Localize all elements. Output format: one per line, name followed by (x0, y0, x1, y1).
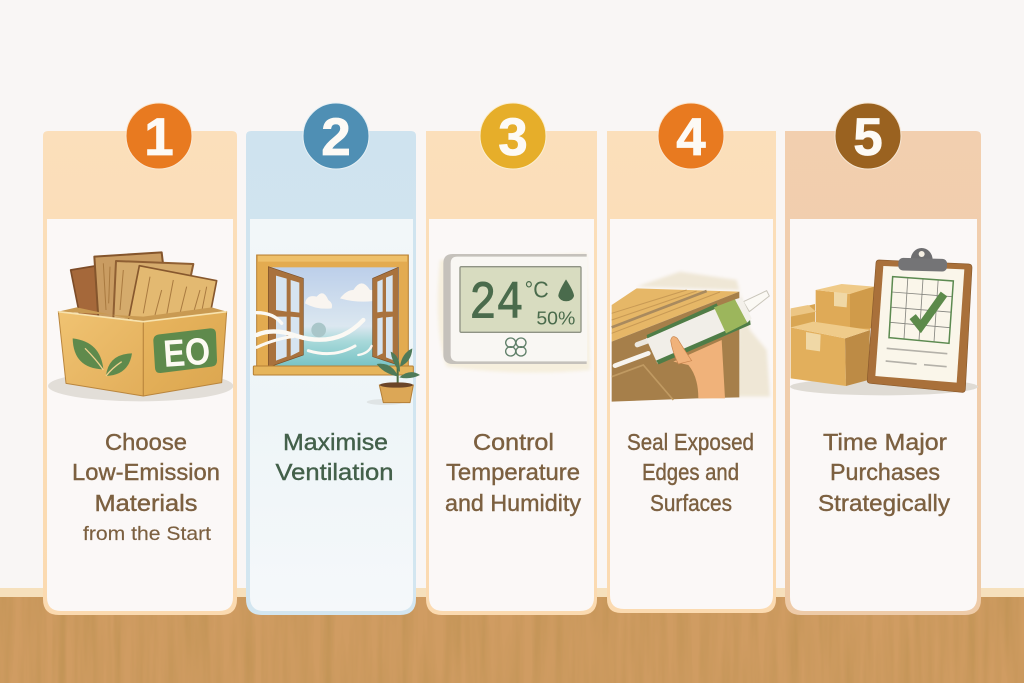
left window sash (268, 267, 303, 367)
caulk tube (646, 298, 752, 363)
step 3 text: Temperature (446, 459, 580, 485)
panel: step 3 (426, 103, 597, 615)
green checkmark (913, 294, 944, 327)
step 1 text: from the Start (83, 523, 212, 545)
step 3 card body (429, 219, 594, 611)
step 3 text: and Humidity (445, 490, 581, 516)
step 5 card body (790, 219, 977, 611)
step 5 text: Purchases (830, 459, 940, 485)
right window sash (373, 267, 398, 365)
step 5 card frame and header (785, 131, 981, 615)
plunger rod (615, 353, 648, 366)
leaf logo (73, 338, 132, 376)
display: 50% (536, 307, 575, 328)
step 5 number badge: 5 (853, 108, 883, 167)
step 1 text: Choose (105, 429, 187, 455)
clipboard paper (875, 266, 964, 383)
step 1 text: Low-Emission (72, 459, 220, 485)
step 5 text: Time Major (823, 429, 947, 455)
icon: hand sealing wood edge with caulk tube (612, 272, 770, 402)
text lines on clipboard (886, 348, 947, 367)
step 4 text: Edges and (642, 459, 739, 485)
clipboard board (867, 260, 972, 392)
panel: step 5 (785, 103, 981, 615)
step 5 number badge (835, 103, 901, 169)
caulk nozzle (743, 291, 769, 312)
step 1 text: Materials (94, 490, 198, 516)
step 4 text: Seal Exposed (627, 429, 754, 455)
clouds (305, 283, 388, 309)
palm and forearm (673, 340, 725, 398)
step 3 number badge: 3 (498, 108, 528, 167)
step 2 text (276, 429, 394, 485)
checklist grid (889, 277, 953, 343)
step 1 text (72, 429, 220, 545)
display: °C (525, 276, 549, 302)
step 4 number badge (658, 103, 724, 169)
step 1 card body (47, 219, 233, 611)
step 4 card frame and header (607, 131, 776, 613)
potted plant (377, 348, 420, 403)
display: 24 (469, 274, 523, 334)
step 5 text: Strategically (818, 490, 951, 516)
step 3 card frame and header (426, 131, 597, 615)
panel: step 2 (246, 103, 420, 615)
step 4 card body (610, 219, 773, 609)
step 4 number badge: 4 (676, 108, 706, 167)
step 2 number badge: 2 (321, 108, 351, 167)
step 2 text: Ventilation (276, 459, 394, 485)
step 2 card frame and header (246, 131, 416, 615)
step 2 card body (250, 219, 413, 611)
fan icon (506, 338, 526, 356)
step 3 number badge (480, 103, 546, 169)
icon: open window with breeze and potted plant (253, 255, 420, 405)
window sill (253, 366, 413, 375)
display (460, 267, 581, 334)
wooden floor (0, 588, 1024, 683)
EO label: EO (162, 331, 212, 376)
step 3 text: Control (473, 429, 554, 455)
icon: digital thermostat showing 24 C and 50 percent (438, 253, 590, 373)
step 3 text (445, 429, 581, 516)
clipboard clip (898, 248, 947, 272)
thumb (671, 337, 692, 364)
step 1 card frame and header (43, 131, 237, 615)
step 1 number badge: 1 (144, 108, 174, 167)
step 2 text: Maximise (283, 429, 388, 455)
step 4 text: Surfaces (650, 490, 732, 516)
step 4 text (627, 429, 754, 516)
panel: step 1 (43, 103, 237, 615)
icon: stacked boxes and clipboard with checkmark (790, 248, 978, 395)
icon: box of wood boards with EO label (48, 252, 233, 401)
step 2 number badge (303, 103, 369, 169)
cardboard boxes (791, 284, 874, 386)
step 5 text (818, 429, 951, 516)
breeze lines (257, 313, 372, 355)
panel: step 4 (607, 103, 776, 613)
step 1 number badge (126, 103, 192, 169)
